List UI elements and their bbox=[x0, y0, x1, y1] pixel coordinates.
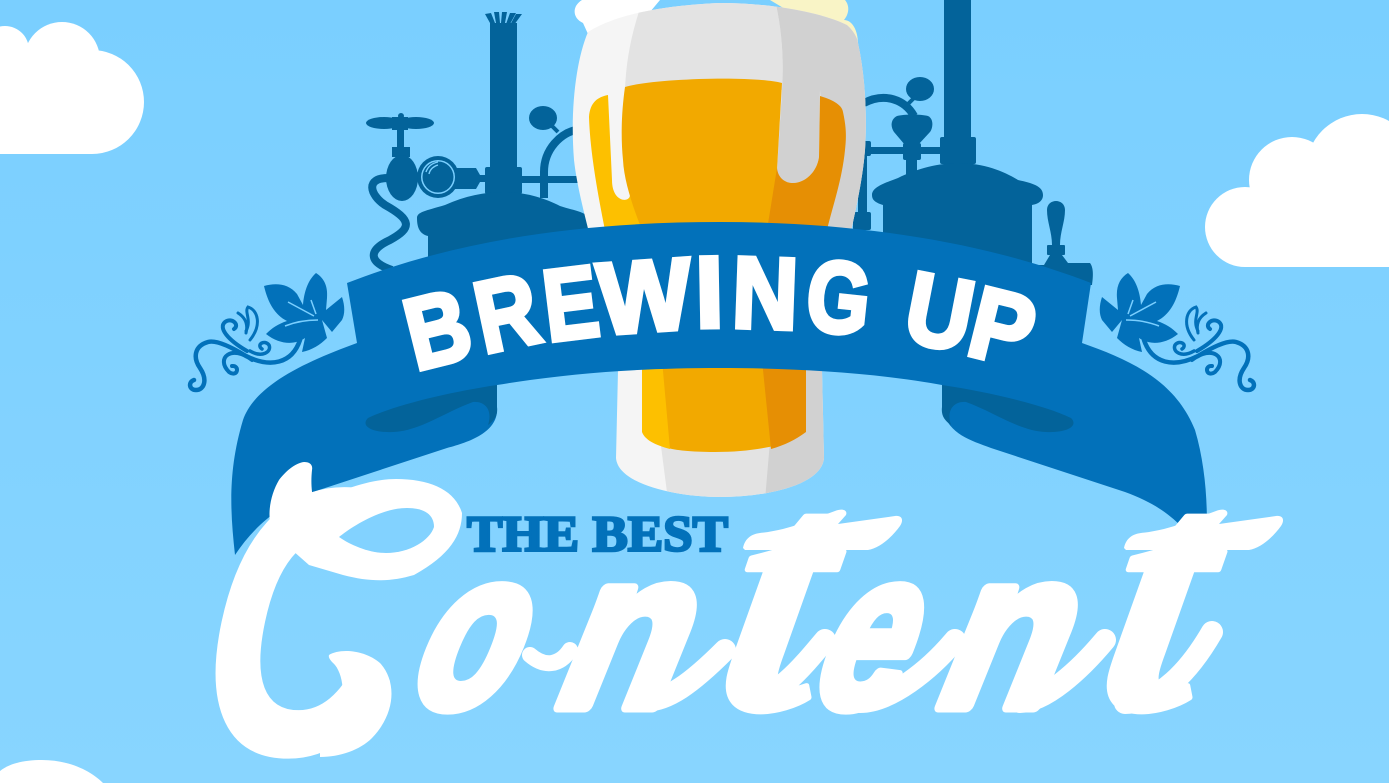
heading: BREWING UP: E bbox=[537, 245, 604, 363]
cloud: right bbox=[1205, 114, 1389, 267]
beer: upper centre bbox=[622, 79, 782, 230]
cloud: top left bbox=[0, 22, 144, 154]
valve handle bbox=[366, 113, 434, 201]
heading: Content: n bbox=[527, 508, 747, 753]
heading: BREWING UP: W bbox=[594, 237, 696, 356]
subheading: THE BEST: THE BEST bbox=[467, 507, 728, 563]
heading: BREWING UP: R bbox=[465, 252, 548, 375]
heading: Content: e bbox=[785, 506, 973, 753]
ribbon fold: right bbox=[942, 385, 1073, 432]
cloud: bottom left bbox=[0, 760, 103, 783]
heading: BREWING UP: I bbox=[694, 237, 724, 349]
foam bbox=[575, 0, 858, 44]
heading: Content: t bbox=[700, 406, 872, 782]
heading: Content: t bbox=[1081, 406, 1253, 782]
beer: lower bbox=[662, 368, 771, 452]
glass right panel bbox=[766, 6, 866, 494]
pipe arc: right bbox=[864, 96, 916, 116]
ribbon fold: left bbox=[366, 385, 497, 432]
pipes and hose: left bbox=[372, 126, 580, 270]
beer: upper left strip bbox=[589, 95, 642, 230]
gauge ball: left bbox=[529, 106, 557, 130]
script flourishes and connecting strokes bbox=[269, 462, 1283, 757]
scrollwork bbox=[190, 307, 300, 390]
beer: upper right shade bbox=[767, 96, 846, 230]
beer glass bbox=[560, 0, 880, 500]
heading: BREWING UP: N bbox=[730, 237, 800, 351]
heading: BREWING UP: P bbox=[959, 265, 1046, 390]
heading: Content: n bbox=[908, 508, 1128, 753]
heading: BREWING UP: B bbox=[394, 267, 482, 391]
heading: BREWING UP bbox=[394, 237, 1046, 391]
heading: Content: o bbox=[382, 508, 582, 753]
heading: BREWING UP: G bbox=[801, 239, 876, 357]
brewing equipment: right bbox=[853, 0, 1093, 285]
hop ornament: right bbox=[1100, 273, 1254, 390]
ribbon banner bbox=[231, 222, 1207, 555]
heading: Content bbox=[168, 406, 1253, 783]
leaf veins bbox=[285, 300, 318, 326]
heading: BREWING UP: U bbox=[897, 251, 982, 374]
pressure gauge bbox=[417, 156, 488, 198]
brewing equipment: left bbox=[366, 12, 590, 270]
hop ornament: left bbox=[190, 273, 344, 390]
glass centre panel bbox=[625, 0, 783, 500]
leaf bbox=[264, 273, 344, 352]
